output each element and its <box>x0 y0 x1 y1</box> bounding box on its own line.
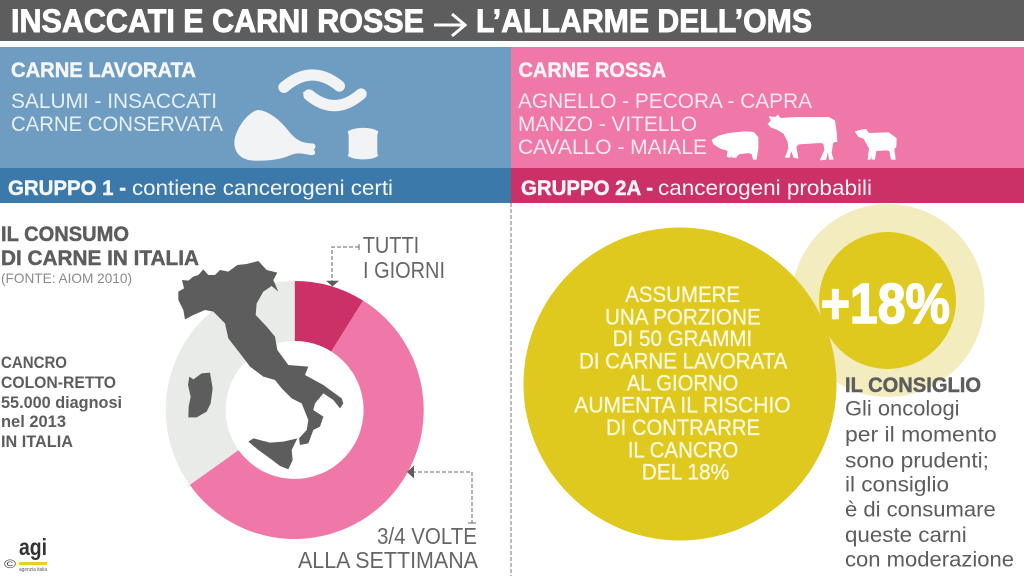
icon: cured meats <box>234 75 378 161</box>
panel: gruppo 1 strip: contiene cancerogeni certi <box>132 177 393 200</box>
big circle: risk statement: ASSUMERE <box>625 282 740 307</box>
map: italy <box>178 261 343 469</box>
text: meat types: CAVALLO - MAIALE <box>518 135 707 159</box>
logo: agi <box>4 534 47 573</box>
text: cancro colon-retto <box>1 353 122 451</box>
text: cancro colon-retto: CANCRO <box>1 353 67 372</box>
text: cancro colon-retto: nel 2013 <box>1 412 66 431</box>
big circle: risk statement: DEL 18% <box>642 460 729 485</box>
text: cancro colon-retto: IN ITALIA <box>1 432 73 451</box>
text: advice: per il momento <box>845 424 997 447</box>
label: tutti i giorni <box>363 232 445 283</box>
text: advice: sono prudenti; <box>845 450 989 473</box>
big circle: risk statement: UNA PORZIONE <box>605 304 761 329</box>
donut chart <box>166 281 424 539</box>
text: carne conservata: CARNE CONSERVATA <box>11 112 224 136</box>
label: 3/4 volte alla settimana: 3/4 VOLTE <box>377 523 477 549</box>
label: 3/4 volte alla settimana: ALLA SETTIMANA <box>298 547 479 573</box>
label: tutti i giorni: I GIORNI <box>363 257 445 283</box>
callout ring: +18% <box>792 204 984 397</box>
heading: il consiglio: IL CONSIGLIO <box>845 374 981 397</box>
text: meat types: AGNELLO - PECORA - CAPRA <box>518 89 813 113</box>
logo: agi: © <box>4 557 16 571</box>
text: advice: con moderazione <box>845 549 1014 572</box>
big circle: risk statement: AUMENTA IL RISCHIO <box>574 393 791 418</box>
title bar <box>0 0 1024 41</box>
arrow: tutti i giorni <box>326 244 359 286</box>
heading: il consumo di carne in italia: IL CONSUMO <box>1 223 129 246</box>
text: meat types <box>518 89 813 159</box>
title bar: L’ALLARME DELL’OMS <box>476 3 812 39</box>
big circle: risk statement: DI CONTRARRE <box>606 415 760 440</box>
text: advice: è di consumare <box>845 499 996 522</box>
text: cancro colon-retto: 55.000 diagnosi <box>1 393 122 412</box>
big circle: risk statement: DI 50 GRAMMI <box>613 326 752 351</box>
label: 3/4 volte alla settimana <box>298 523 479 573</box>
big circle: risk statement: AL GIORNO <box>627 371 738 396</box>
text: meat types: MANZO - VITELLO <box>518 112 697 136</box>
panel: gruppo 2a strip: cancerogeni probabili <box>658 177 872 200</box>
logo: agi: agi <box>19 534 47 560</box>
logo: agi: agenzia italia <box>19 567 47 573</box>
panel: gruppo 2a strip: GRUPPO 2A - <box>521 177 653 200</box>
heading: il consumo di carne in italia <box>1 223 199 270</box>
big circle: risk statement: IL CANCRO <box>628 438 738 463</box>
text: advice: Gli oncologi <box>845 398 960 421</box>
text: source: (FONTE: AIOM 2010) <box>1 270 132 286</box>
heading: carne lavorata: CARNE LAVORATA <box>11 59 196 82</box>
text: cancro colon-retto: COLON-RETTO <box>1 373 116 392</box>
arrow: 3/4 volte <box>407 466 476 523</box>
figure: +18%: +18% <box>821 272 950 336</box>
panel: carne lavorata <box>0 47 511 168</box>
big circle: risk statement <box>524 228 836 540</box>
panel: gruppo 2a strip <box>511 168 1024 203</box>
text: advice <box>845 398 1014 572</box>
text: salumi insaccati: SALUMI - INSACCATI <box>11 89 217 113</box>
panel: gruppo 1 strip <box>0 168 511 203</box>
icon: farm animals <box>712 115 896 160</box>
big circle: risk statement: DI CARNE LAVORATA <box>579 348 788 373</box>
heading: il consumo di carne in italia: DI CARNE IN ITALIA <box>1 247 199 270</box>
panel: gruppo 1 strip: GRUPPO 1 - <box>8 177 126 200</box>
text: advice: il consiglio <box>845 474 949 497</box>
text: advice: queste carni <box>845 524 967 547</box>
panel: carne rossa <box>511 47 1024 168</box>
title bar: INSACCATI E CARNI ROSSE <box>11 3 424 39</box>
label: tutti i giorni: TUTTI <box>363 232 419 258</box>
heading: carne rossa: CARNE ROSSA <box>518 59 666 82</box>
